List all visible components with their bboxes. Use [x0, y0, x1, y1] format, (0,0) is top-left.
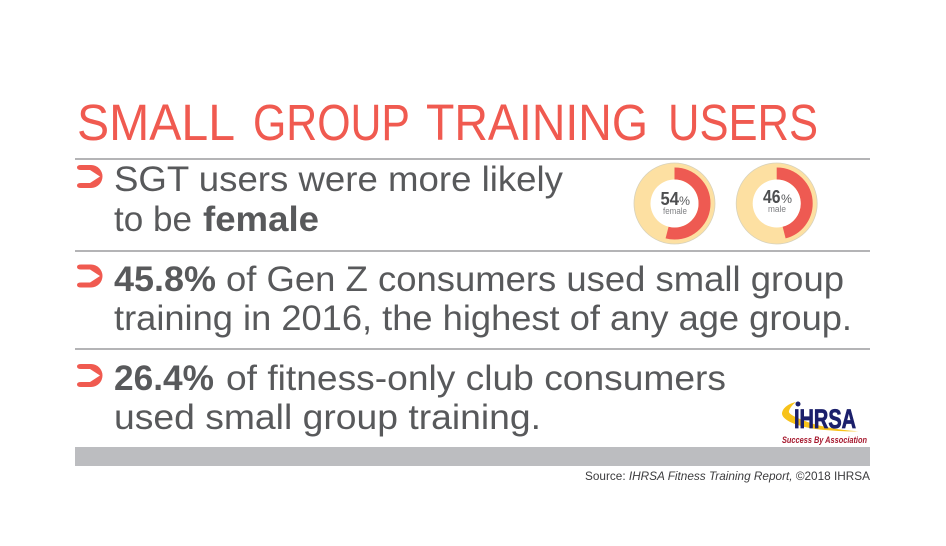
text: fitness-only finding: of fitness-only club consumers: [226, 359, 726, 398]
title: TRAINING: [426, 94, 648, 151]
text: gender finding: [114, 160, 564, 239]
chart: male donut: male: [768, 204, 786, 214]
chart: male donut: %: [781, 192, 792, 206]
text: fitness-only finding: used small group training.: [114, 398, 541, 437]
chart: male donut: 46: [763, 187, 780, 207]
text: gender finding: SGT users were more likely: [114, 160, 564, 199]
logo: IHRSA: Success By Association: [782, 435, 867, 446]
panel: gender finding: [77, 160, 817, 244]
text: Gen Z finding: of Gen Z consumers used small group: [226, 260, 844, 299]
title: GROUP: [253, 94, 410, 151]
text: Gen Z finding: 45.8%: [114, 260, 216, 299]
icon: bullet arrow 3: [77, 364, 103, 387]
title: [77, 94, 818, 151]
chart: female donut: female: [663, 206, 687, 216]
text: Gen Z finding: training in 2016, the highest of any age group.: [114, 299, 852, 338]
panel: Gen Z finding: [77, 260, 852, 338]
text: fitness-only finding: [114, 359, 726, 437]
icon: bullet arrow 2: [77, 264, 103, 288]
chart: female donut: 54: [660, 189, 679, 209]
source note: Source: IHRSA Fitness Training Report, ©2018 IHRSA: [585, 469, 870, 483]
chart: male donut: [736, 163, 817, 244]
gray footer bar: [75, 447, 870, 466]
text: gender finding: to be: [114, 200, 192, 239]
chart: female donut: [634, 163, 715, 244]
title: USERS: [668, 94, 818, 151]
logo: IHRSA: [782, 402, 867, 446]
chart: female donut: %: [679, 194, 690, 208]
text: gender finding: female: [203, 200, 319, 239]
icon: bullet arrow 1: [77, 165, 103, 188]
panel: fitness-only finding: [77, 359, 726, 437]
title: SMALL: [77, 94, 235, 151]
text: Gen Z finding: [114, 260, 852, 338]
text: fitness-only finding: 26.4%: [114, 359, 214, 398]
logo: IHRSA: IHRSA: [794, 404, 856, 434]
